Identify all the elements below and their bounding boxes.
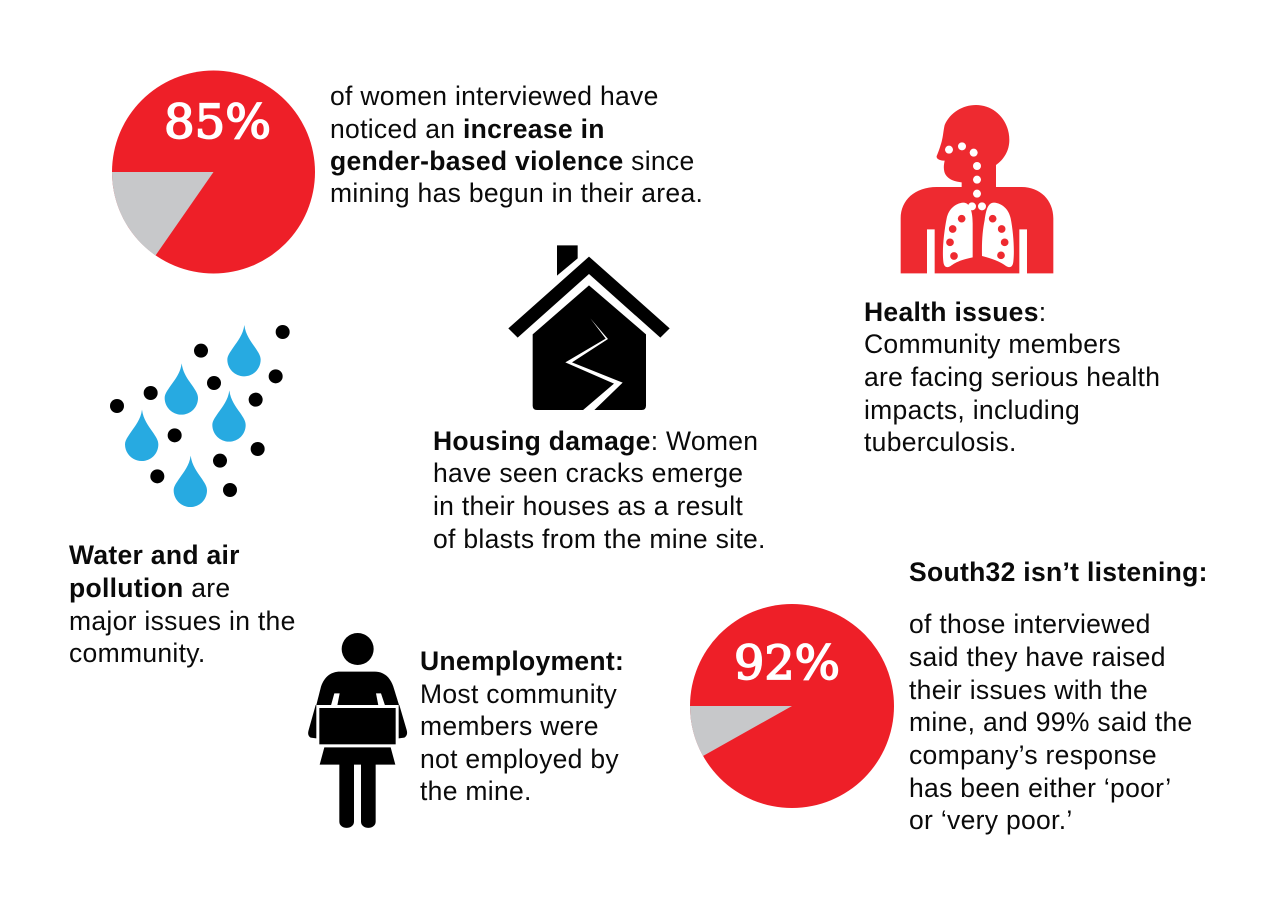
text: housing damage: Housing damage: Women (433, 426, 758, 456)
text: South32 isn't listening: said they have raised (909, 642, 1166, 672)
text: South32 isn't listening: their issues with the (909, 675, 1148, 705)
text: gender-based violence: noticed an increase in (330, 114, 605, 144)
text: unemployment (420, 646, 624, 806)
text: South32 isn't listening: of those interviewed (909, 609, 1151, 639)
icon: person with infected lungs (901, 105, 1053, 273)
text: South32 isn't listening (909, 557, 1208, 835)
text: water and air pollution (69, 540, 296, 668)
text: health issues: impacts, including (864, 395, 1080, 425)
icon: water drops and air particles (110, 325, 290, 507)
pie chart: 85%: 85% (164, 95, 271, 150)
text: unemployment: the mine. (420, 776, 532, 806)
text: gender-based violence: gender-based violence since (330, 146, 695, 176)
text: unemployment: Most community (420, 679, 618, 709)
text: water and air pollution: major issues in the (69, 606, 296, 636)
text: unemployment: members were (420, 711, 599, 741)
text: South32 isn't listening: company’s response (909, 740, 1157, 770)
text: South32 isn't listening: has been either ‘poor’ (909, 773, 1171, 803)
text: South32 isn't listening: or ‘very poor.’ (909, 805, 1073, 835)
text: gender-based violence: of women interviewed have (330, 81, 659, 111)
text: health issues: are facing serious health (864, 362, 1160, 392)
icon: woman holding box (308, 633, 407, 828)
text: water and air pollution: community. (69, 638, 206, 668)
text: housing damage: have seen cracks emerge (433, 458, 743, 488)
text: health issues (864, 297, 1160, 457)
text: gender-based violence: mining has begun in their area. (330, 178, 703, 208)
text: housing damage (433, 426, 766, 554)
text: water and air pollution: Water and air (69, 540, 240, 570)
text: health issues: Community members (864, 329, 1121, 359)
text: housing damage: in their houses as a result (433, 491, 743, 521)
text: health issues: Health issues: (864, 297, 1046, 327)
text: water and air pollution: pollution are (69, 573, 230, 603)
text: health issues: tuberculosis. (864, 427, 1017, 457)
pie chart: 85% (112, 70, 315, 274)
text: unemployment: Unemployment: (420, 646, 624, 676)
text: unemployment: not employed by (420, 744, 619, 774)
pie chart: 92% (690, 604, 894, 808)
icon: cracked house (508, 245, 670, 410)
pie chart: 92%: 92% (734, 636, 840, 691)
text: housing damage: of blasts from the mine site. (433, 524, 766, 554)
text: gender-based violence (330, 81, 703, 208)
text: South32 isn't listening: South32 isn’t listening: (909, 557, 1208, 587)
text: South32 isn't listening: mine, and 99% said the (909, 707, 1193, 737)
